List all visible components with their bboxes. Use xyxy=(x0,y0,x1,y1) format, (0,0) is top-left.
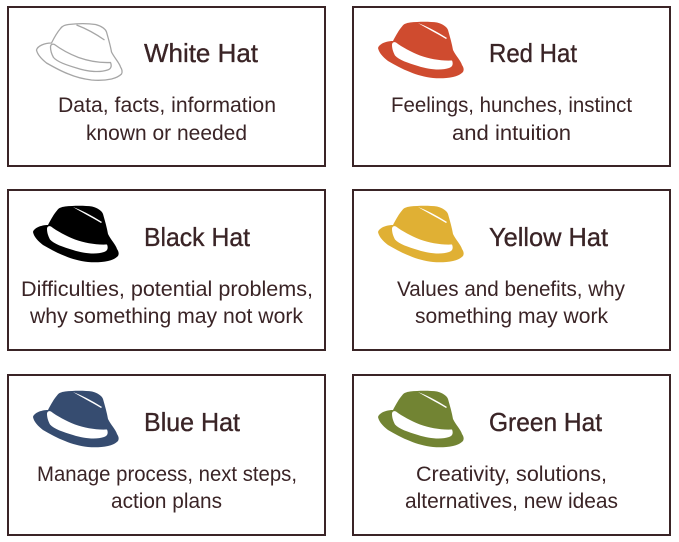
heading: Black Hat: Black Hat xyxy=(144,222,251,252)
text: Red Hat description: Feelings, hunches, instinct xyxy=(391,94,632,117)
text: White Hat description: Data, facts, information xyxy=(58,94,276,117)
heading: Red Hat: Red Hat xyxy=(489,38,578,68)
text: Green Hat description: alternatives, new ideas xyxy=(405,490,618,513)
text: Yellow Hat description: Values and benefits, why xyxy=(397,278,625,301)
panel: Yellow Hat xyxy=(353,190,670,350)
icon: red hat xyxy=(378,22,464,78)
panel: Black Hat xyxy=(8,190,325,350)
text: Blue Hat description: action plans xyxy=(111,490,222,513)
icon: yellow hat xyxy=(378,206,464,262)
text: White Hat description xyxy=(58,94,276,145)
icon: green hat xyxy=(378,391,464,447)
text: Red Hat description xyxy=(391,94,632,145)
text: Yellow Hat description: something may work xyxy=(415,305,608,328)
text: Yellow Hat description xyxy=(397,278,625,328)
text: Blue Hat description: Manage process, next steps, xyxy=(37,463,297,486)
panel: White Hat xyxy=(8,7,325,166)
icon: blue hat xyxy=(33,391,119,447)
heading: Green Hat: Green Hat xyxy=(489,407,603,437)
panel: Green Hat xyxy=(353,375,670,535)
text: White Hat description: known or needed xyxy=(86,122,247,145)
heading: Blue Hat: Blue Hat xyxy=(144,407,241,437)
heading: White Hat: White Hat xyxy=(144,38,259,68)
text: Red Hat description: and intuition xyxy=(452,122,571,145)
text: Black Hat description: Difficulties, potential problems, xyxy=(21,278,313,301)
icon: white hat xyxy=(36,24,122,80)
icon: black hat xyxy=(33,206,119,262)
panel: Red Hat xyxy=(353,7,670,166)
text: Blue Hat description xyxy=(37,463,297,513)
text: Black Hat description: why something may not work xyxy=(29,305,303,328)
panel: Blue Hat xyxy=(8,375,325,535)
text: Green Hat description: Creativity, solutions, xyxy=(416,463,607,486)
text: Black Hat description xyxy=(21,278,313,328)
text: Green Hat description xyxy=(405,463,618,513)
heading: Yellow Hat: Yellow Hat xyxy=(489,222,609,252)
